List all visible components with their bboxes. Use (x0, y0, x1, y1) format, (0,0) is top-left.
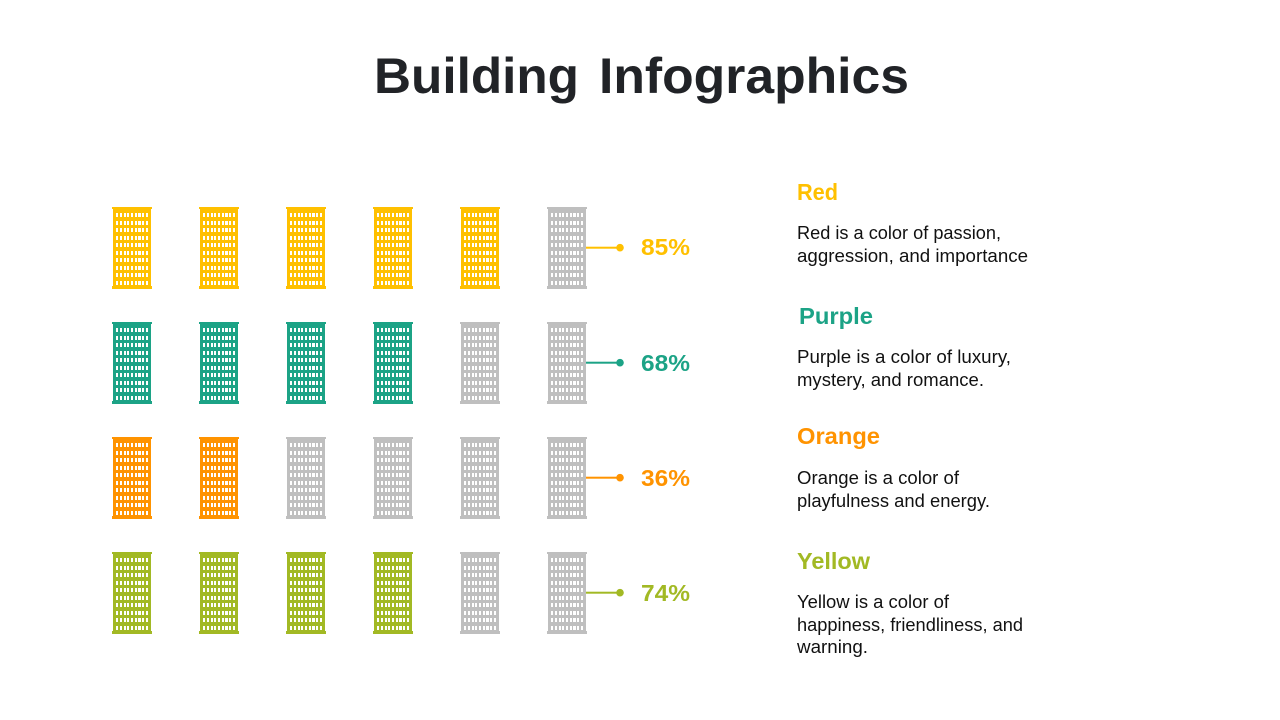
building 4 filled (373, 552, 413, 634)
description: Red: Red is a color of passion, (797, 222, 1001, 243)
building 5 empty (460, 322, 500, 404)
building 2 filled (199, 552, 239, 634)
legend block: Purple (797, 303, 1011, 390)
building 3 empty (286, 437, 326, 519)
heading: Red: Red (797, 179, 838, 205)
building 2 filled (199, 437, 239, 519)
description: Orange: playfulness and energy. (797, 490, 990, 511)
description: Purple: mystery, and romance. (797, 369, 984, 390)
building 4 filled (373, 207, 413, 289)
heading: Orange: Orange (797, 423, 880, 449)
building 6 empty (547, 207, 587, 289)
building 1 filled (112, 207, 152, 289)
building 5 filled (460, 207, 500, 289)
building 6 empty (547, 552, 587, 634)
building 1 filled (112, 552, 152, 634)
description: Yellow: Yellow is a color of (797, 591, 950, 612)
title: Infographics (599, 48, 909, 104)
row: Purple 68% (112, 322, 690, 404)
value 68%: 68% (641, 350, 690, 376)
heading: Yellow: Yellow (797, 548, 870, 574)
description: Yellow: happiness, friendliness, and (797, 614, 1023, 635)
legend block: Yellow (796, 548, 1023, 657)
building 1 filled (112, 322, 152, 404)
building 2 filled (199, 322, 239, 404)
building 2 filled (199, 207, 239, 289)
building 5 empty (460, 552, 500, 634)
description: Red: aggression, and importance (797, 245, 1028, 266)
row: Red 85% (112, 207, 690, 289)
connector line and dot (586, 244, 624, 252)
value 74%: 74% (641, 580, 690, 606)
legend block: Red (797, 179, 1028, 266)
connector line and dot (586, 589, 624, 596)
building 4 empty (373, 437, 413, 519)
building 4 filled (373, 322, 413, 404)
legend block: Orange (797, 423, 990, 511)
description: Orange: Orange is a color of (797, 467, 960, 488)
value 36%: 36% (641, 465, 690, 491)
building 1 filled (112, 437, 152, 519)
description: Purple: Purple is a color of luxury, (797, 346, 1011, 367)
heading: Purple: Purple (799, 303, 873, 329)
value 85%: 85% (641, 234, 690, 260)
building 3 filled (286, 207, 326, 289)
building 6 empty (547, 437, 587, 519)
title: Building (374, 48, 579, 104)
building 5 empty (460, 437, 500, 519)
description: Yellow: warning. (796, 636, 868, 657)
connector line and dot (586, 359, 624, 367)
building 6 empty (547, 322, 587, 404)
row: Yellow 74% (112, 552, 690, 634)
row: Orange 36% (112, 437, 690, 519)
connector line and dot (586, 474, 624, 482)
building 3 filled (286, 552, 326, 634)
building 3 filled (286, 322, 326, 404)
